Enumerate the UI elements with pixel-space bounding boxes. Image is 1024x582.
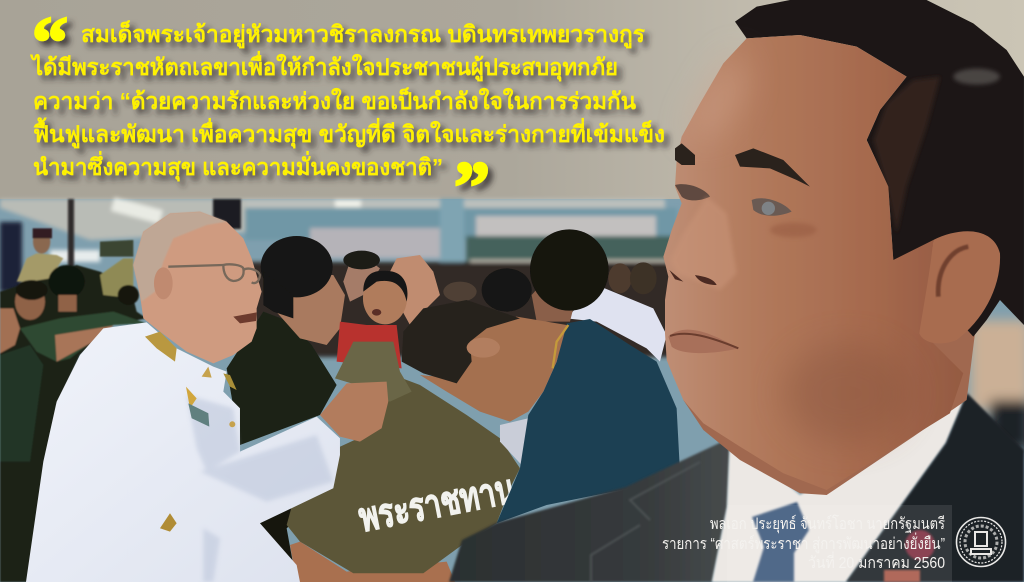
child and background men <box>337 251 440 368</box>
left eyebrow <box>675 143 695 165</box>
left eye <box>675 184 710 200</box>
prime minister portrait <box>449 0 1024 582</box>
room ceiling and wall <box>0 197 685 357</box>
official in white uniform <box>26 212 388 582</box>
neck and jaw <box>683 233 975 495</box>
hair <box>402 300 520 383</box>
white tunic <box>26 322 340 582</box>
closing quote mark: ” <box>454 147 490 227</box>
prime minister background blur at right <box>970 320 1024 450</box>
date: วันที่ 20 มกราคม 2560 <box>808 551 945 572</box>
ear <box>919 231 1000 343</box>
hair <box>735 0 1024 337</box>
white shirt <box>712 393 967 582</box>
right suit lapel <box>846 393 1024 582</box>
brown hairline fade <box>873 77 940 233</box>
lapel edge <box>591 462 700 582</box>
quote lines <box>29 19 665 182</box>
right eye <box>752 198 792 216</box>
man bowing <box>402 300 680 523</box>
soldier sleeve and arm <box>20 312 147 362</box>
teal shirt <box>497 319 680 523</box>
pole and beam <box>68 199 241 269</box>
arm under sack <box>290 542 455 582</box>
sack printed label: พระราชทาน <box>355 467 519 540</box>
head <box>133 212 262 363</box>
gold necklace <box>553 325 568 368</box>
quote lines: ฟื้นฟูและพัฒนา เพื่อความสุข ขวัญที่ดี จิตใจและร่างกายที่เข้มแข็ง <box>33 117 665 149</box>
quote lines: ได้มีพระราชหัตถเลขาเพื่อให้กำลังใจประชาชนผู้ประสบอุทกภัย <box>29 50 618 82</box>
lips <box>668 330 738 353</box>
lapel pin <box>905 530 935 560</box>
mouth shadow <box>233 312 257 323</box>
quotation text <box>29 2 665 227</box>
face and neck <box>420 317 567 422</box>
right eyebrow <box>735 148 810 187</box>
grey hair <box>133 212 227 302</box>
eye socket shadow <box>770 223 817 237</box>
nose light <box>670 197 737 290</box>
dark mid-room crowd <box>245 262 685 357</box>
quote lines: นำมาซึ่งความสุข และความมั่นคงของชาติ” <box>33 150 443 182</box>
back crowd and woman with dark hair <box>443 229 667 362</box>
opening quote mark: “ <box>32 2 68 82</box>
left suit shoulder <box>449 438 730 582</box>
white garment beneath face <box>500 418 528 465</box>
left soldier face <box>0 308 20 353</box>
top quote band background <box>0 0 1024 199</box>
fist gripping sack <box>320 382 388 442</box>
cheek and jaw shading <box>783 343 910 443</box>
crowd of soldiers on the left <box>0 228 147 582</box>
hair highlight <box>953 69 1000 85</box>
caption strip overlay <box>727 505 952 582</box>
event photo background <box>0 197 1024 582</box>
tie <box>752 502 809 582</box>
sack neck <box>335 342 412 402</box>
soldier on balcony <box>17 253 63 282</box>
ear <box>467 338 500 358</box>
forehead light <box>687 50 747 137</box>
quote lines: ความว่า “ด้วยความรักและห่วงใย ขอเป็นกำลังใจในการร่วมกัน <box>33 86 636 114</box>
icon: government seal <box>956 518 1006 566</box>
ear <box>154 267 173 299</box>
lapel ribbon <box>884 570 920 582</box>
quote lines: สมเด็จพระเจ้าอยู่หัวมหาวชิราลงกรณ บดินทรเทพยวรางกูร <box>81 19 646 49</box>
programme title: รายการ “ศาสตร์พระราชา สู่การพัฒนาอย่างยั่งยืน” <box>662 532 945 554</box>
sack held by the official <box>287 342 520 582</box>
caption text block <box>662 514 945 572</box>
tunic shading <box>187 395 333 582</box>
man in dark green uniform <box>227 236 345 582</box>
gold epaulette <box>145 332 177 362</box>
presenter name: พลเอก ประยุทธ์ จันทร์โอชา นายกรัฐมนตรี <box>710 514 945 534</box>
gold collar and medals <box>160 367 237 532</box>
face <box>663 35 963 490</box>
sack body <box>287 375 520 573</box>
nostril <box>669 270 717 285</box>
spectacles <box>168 264 260 283</box>
